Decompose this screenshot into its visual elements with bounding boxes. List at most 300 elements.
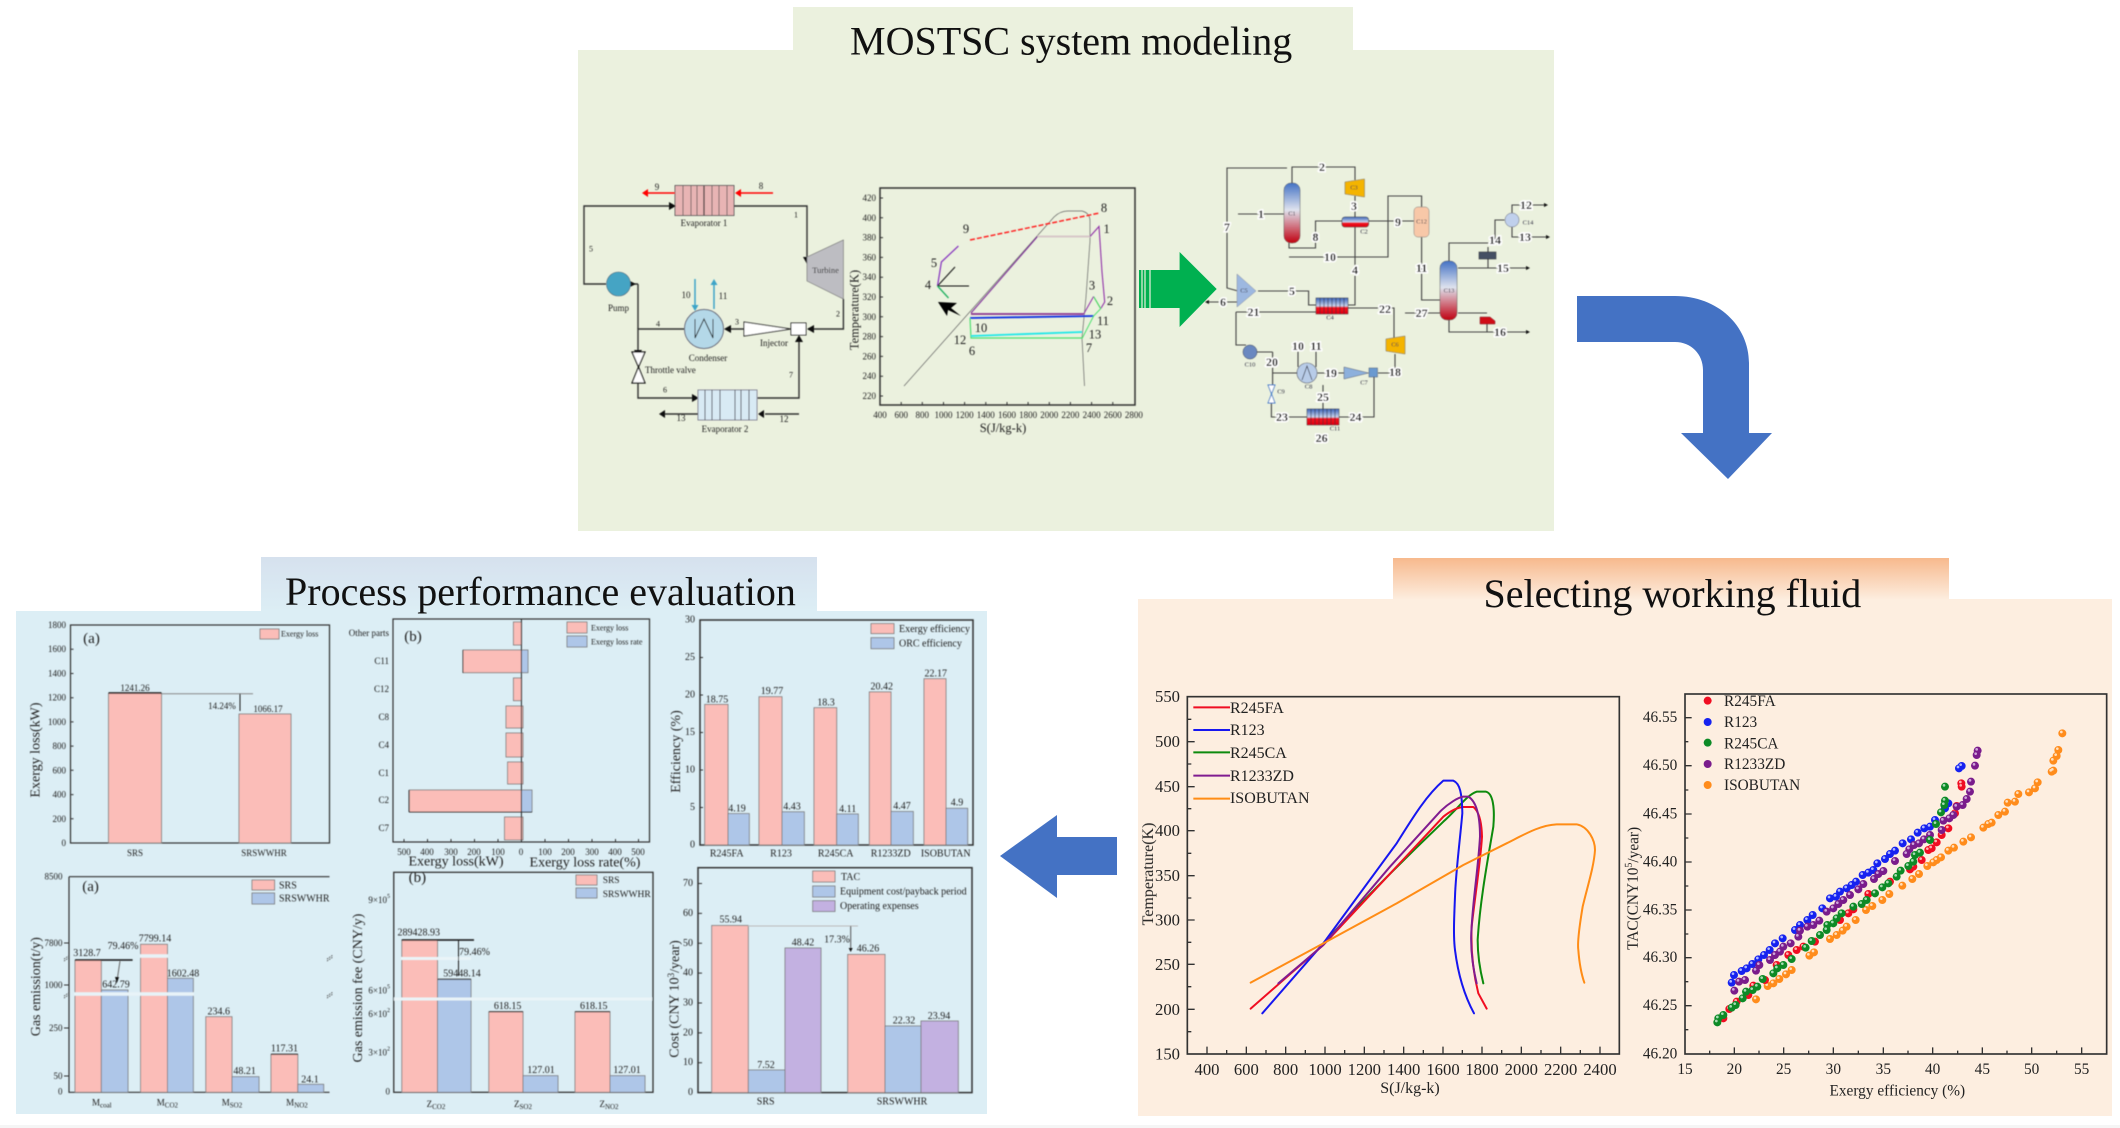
axis labels: Exergy loss(kW) <box>408 854 504 870</box>
value labels and reduction arrow: 289428.93 <box>398 928 440 938</box>
axis labels: 200 <box>52 814 66 824</box>
series: R245FA <box>1722 782 1962 1018</box>
value labels and reduction arrow: 48.42 <box>792 937 814 948</box>
value labels and reduction arrow: 1602.48 <box>167 968 199 980</box>
T-S axis labels: 400 <box>862 213 876 223</box>
state point numbers: 3 <box>1089 278 1095 292</box>
axes: 40 <box>683 968 693 979</box>
axes: 20 <box>685 690 695 700</box>
value labels and reduction arrow: 234.6 <box>208 1006 230 1018</box>
column C13 <box>1440 261 1457 320</box>
evaporator 2: Evaporator 2 <box>702 424 748 434</box>
axes: 30 <box>685 614 695 626</box>
condenser: 11 <box>719 291 727 301</box>
value labels and reduction arrow: 117.31 <box>271 1044 298 1054</box>
T-S axis labels: 1400 <box>977 410 995 420</box>
axis labels: 300 <box>1155 910 1180 929</box>
chart: exergy loss (a) <box>28 620 330 858</box>
axes: NO2 <box>294 1102 308 1110</box>
legend: SRSWWHR <box>603 890 651 900</box>
stream numbers: 11 <box>1310 339 1322 353</box>
T-S axis labels: 240 <box>862 371 876 381</box>
axis labels: 450 <box>1155 777 1180 796</box>
axes: 2 <box>387 1047 390 1053</box>
axes: SO2 <box>230 1102 243 1110</box>
legend: R245CA <box>1724 735 1779 752</box>
axes: 6×10 <box>368 986 387 996</box>
legend: Exergy efficiency <box>899 624 970 635</box>
stream numbers: 19 <box>1325 366 1337 380</box>
evaporator 2: 13 <box>676 413 686 423</box>
axes: coal <box>100 1102 112 1110</box>
legend: R245FA <box>1724 693 1776 710</box>
axis ticks <box>1187 719 1600 1054</box>
axis labels: 200 <box>561 847 575 857</box>
diverging bars <box>409 619 532 842</box>
axis labels <box>28 620 287 858</box>
axis labels: 1600 <box>48 644 66 654</box>
stream numbers: 14 <box>1489 233 1501 247</box>
chart: system T-S diagram <box>848 188 1143 435</box>
axis labels: 2000 <box>1505 1060 1538 1079</box>
bars <box>74 944 324 1092</box>
working fluid loop lines: 4 <box>656 320 660 328</box>
T-S axis labels: 600 <box>894 410 908 420</box>
axis labels: (a) <box>83 631 100 647</box>
axis labels: 46.25 <box>1643 997 1678 1014</box>
evaporator 1: Evaporator 1 <box>681 218 727 228</box>
axis labels: C8 <box>378 712 389 722</box>
column C1: C1 <box>1288 210 1296 218</box>
axes: M <box>222 1098 230 1108</box>
axis labels: C12 <box>374 684 389 694</box>
axes: 70 <box>683 878 693 889</box>
axis labels: 45 <box>1975 1061 1990 1078</box>
state point numbers: 8 <box>1101 201 1107 215</box>
throttle valve: Throttle valve <box>645 365 696 375</box>
arrow: blue left to evaluation <box>1000 815 1117 898</box>
value labels and reduction arrow: 642.79 <box>102 980 130 990</box>
axis labels <box>349 628 645 870</box>
axis labels: 20 <box>1727 1061 1742 1078</box>
axis labels: Exergy efficiency (%) <box>1830 1082 1965 1099</box>
legend: R123 <box>1230 722 1265 739</box>
axis labels: 55 <box>2074 1061 2090 1078</box>
axes: 5 <box>690 802 695 813</box>
value labels and reduction arrow: 59448.14 <box>443 968 481 980</box>
column C1 <box>1284 183 1300 243</box>
reduction annotation: 1241.26 <box>120 683 150 693</box>
legend: R1233ZD <box>1724 756 1785 773</box>
chart: exergy loss by component (b) <box>349 619 650 870</box>
turbine: Turbine <box>812 265 839 275</box>
legend: SRSWWHR <box>279 894 330 904</box>
axis labels: 46.35 <box>1643 901 1678 918</box>
axis labels: 1400 <box>1387 1060 1420 1079</box>
T-S axis labels: Temperature(K) <box>848 270 862 350</box>
axes <box>666 878 928 1108</box>
axes: R245CA <box>818 848 854 860</box>
axis labels: C7 <box>378 823 389 833</box>
stream numbers: 25 <box>1317 390 1329 404</box>
legend <box>567 622 643 647</box>
axis labels: C2 <box>378 795 389 805</box>
compressor C6: C6 <box>1391 342 1400 348</box>
axes: 6×10 <box>368 1009 387 1019</box>
axes: 0 <box>688 1087 693 1098</box>
axes: ISOBUTAN <box>921 848 971 860</box>
axis labels: 600 <box>52 765 66 775</box>
pump C10 <box>1243 345 1257 368</box>
legend: Exergy loss <box>591 624 628 632</box>
value labels: 4.47 <box>893 801 911 812</box>
T-S axis labels: 2400 <box>1083 410 1101 420</box>
working fluid loop lines: 6 <box>663 386 667 394</box>
stream numbers: 8 <box>1312 230 1318 244</box>
arrow: curved blue to working fluid <box>1577 296 1772 479</box>
axis labels: 500 <box>397 847 411 857</box>
stream numbers: 21 <box>1248 305 1260 319</box>
T-S axis labels: 1200 <box>956 410 974 420</box>
stream numbers: 16 <box>1494 325 1506 339</box>
T-S axis labels: 1800 <box>1019 410 1038 420</box>
diagram: ORC cycle schematic <box>584 181 843 434</box>
state point numbers: 4 <box>925 278 932 292</box>
value labels: 20.42 <box>870 682 893 692</box>
evaporator 2: 12 <box>780 414 788 424</box>
chart: efficiency by working fluid <box>669 614 973 860</box>
T-S axis labels: 380 <box>862 233 876 243</box>
axes <box>29 872 333 1110</box>
working fluid loop lines: 2 <box>836 310 840 318</box>
stream numbers: 22 <box>1379 302 1391 316</box>
value labels and reduction arrow: 79.46% <box>108 941 138 952</box>
evaporator 2 <box>659 390 799 434</box>
value labels and reduction arrow: 22.32 <box>893 1016 915 1026</box>
stream numbers: 12 <box>1520 198 1532 212</box>
value labels: 18.75 <box>706 694 728 706</box>
stream numbers <box>1220 160 1532 445</box>
legend: R245FA <box>1230 700 1284 717</box>
axis labels: 400 <box>52 790 66 800</box>
stream numbers: 18 <box>1389 365 1401 379</box>
axis labels: 600 <box>1234 1060 1259 1079</box>
T-S axis labels <box>848 193 1143 435</box>
value labels: 4.11 <box>839 804 856 815</box>
state point numbers: 2 <box>1107 294 1113 308</box>
bars <box>712 926 958 1093</box>
state point numbers: 9 <box>963 222 969 236</box>
axis labels: 100 <box>491 847 505 857</box>
axis labels: 1800 <box>48 620 66 630</box>
axes: 250 <box>49 1023 63 1033</box>
stream numbers: 4 <box>1352 263 1358 277</box>
axis labels: 300 <box>585 847 599 857</box>
chart: T-S curves of working fluids <box>1140 687 1619 1097</box>
T-S axis labels: 420 <box>862 193 876 203</box>
axis labels: 50 <box>2024 1061 2040 1078</box>
axis labels: 35 <box>1876 1061 1891 1078</box>
axis labels: 800 <box>52 741 66 751</box>
series: R1233ZD <box>1733 749 1978 991</box>
column C13: C13 <box>1444 288 1454 294</box>
legend: ORC efficiency <box>899 638 962 649</box>
bars <box>394 940 652 1092</box>
stream numbers: 3 <box>1351 199 1357 213</box>
legend: R123 <box>1724 714 1758 731</box>
condenser: Condenser <box>689 353 727 363</box>
axes: R1233ZD <box>871 848 911 860</box>
axes: 30 <box>683 998 693 1008</box>
axes: 60 <box>683 908 693 919</box>
stream numbers: 11 <box>1416 261 1427 275</box>
axis labels: 5 <box>1623 863 1634 868</box>
axis labels <box>1623 709 2090 1099</box>
bars <box>108 693 291 843</box>
axes: (b) <box>409 870 426 886</box>
axis labels: 800 <box>1273 1060 1298 1079</box>
axes: SRS <box>757 1096 775 1108</box>
condenser drum <box>1479 252 1496 259</box>
curves <box>1251 781 1595 1013</box>
reduction annotation <box>120 683 283 714</box>
legend: ISOBUTAN <box>1724 777 1800 794</box>
axes: SRSWWHR <box>877 1096 928 1108</box>
axis labels: 1800 <box>1465 1060 1499 1079</box>
axes: Efficiency (%) <box>669 710 684 793</box>
vessel C12 <box>1414 207 1429 237</box>
legend <box>576 875 651 900</box>
value labels: 4.9 <box>951 798 963 808</box>
T-S axis labels: 1600 <box>998 410 1016 420</box>
state point numbers: 11 <box>1097 314 1109 328</box>
axes: R123 <box>770 848 792 860</box>
axis labels: 400 <box>608 847 622 857</box>
axes: 5 <box>387 985 390 991</box>
reduction annotation: 1066.17 <box>253 704 283 714</box>
cooler C14: C14 <box>1523 220 1534 226</box>
heat exchanger C2: C2 <box>1360 228 1368 236</box>
state point numbers: 13 <box>1089 328 1101 342</box>
condenser <box>682 279 727 363</box>
stream numbers: 23 <box>1276 410 1288 424</box>
T-S axis labels: 360 <box>862 252 876 262</box>
state point numbers: 5 <box>931 256 937 270</box>
series: R123 <box>1731 765 1962 983</box>
legend <box>871 624 970 649</box>
axis labels: SRS <box>127 848 143 858</box>
value labels and reduction arrow <box>73 934 319 1086</box>
stream numbers: 6 <box>1220 295 1226 309</box>
throttle valve <box>632 352 696 383</box>
legend <box>1708 693 1800 794</box>
axes: Z <box>514 1099 520 1109</box>
legend: Exergy loss rate <box>591 638 643 646</box>
axis labels: 2200 <box>1544 1060 1577 1079</box>
cooler C14 <box>1505 213 1534 227</box>
state point numbers: 12 <box>954 333 966 347</box>
injector: Injector <box>760 338 788 348</box>
legend: Operating expenses <box>840 901 919 912</box>
condenser C8 <box>1297 363 1317 390</box>
axes: /year) <box>668 940 682 973</box>
series: ISOBUTAN <box>1755 732 2062 999</box>
axis labels: 1200 <box>48 693 66 703</box>
axes <box>351 870 619 1111</box>
T-S axis labels: 220 <box>862 391 876 401</box>
condenser C8: C8 <box>1305 384 1312 390</box>
T-S axis labels: 280 <box>862 332 876 342</box>
axis labels: 1400 <box>48 668 66 678</box>
turbine <box>807 240 843 299</box>
T-S axis labels: 2000 <box>1040 410 1059 420</box>
value labels and reduction arrow: 17.3% <box>824 934 850 946</box>
panel: Process performance evaluation <box>16 557 987 1114</box>
value labels and reduction arrow: 46.26 <box>857 944 879 954</box>
stream numbers: 2 <box>1319 160 1325 174</box>
T-S axis labels: 400 <box>873 410 887 420</box>
T-S axis labels: S(J/kg-k) <box>980 421 1026 435</box>
value labels and reduction arrow: 55.94 <box>719 914 742 926</box>
turbine C5: C5 <box>1240 288 1248 294</box>
value labels: 22.17 <box>924 668 947 680</box>
legend: R1233ZD <box>1230 768 1294 785</box>
saturation dome <box>904 211 1090 386</box>
T-S axis labels: 800 <box>916 410 930 420</box>
axis labels: 400 <box>1195 1060 1219 1079</box>
heat exchanger C11 <box>1307 409 1340 432</box>
axis labels: 46.45 <box>1643 805 1678 822</box>
value labels and reduction arrow: 7.52 <box>757 1060 775 1071</box>
pump C10: C10 <box>1245 362 1255 368</box>
T-S axis labels: 1000 <box>934 410 953 420</box>
axis labels: 2400 <box>1583 1060 1617 1079</box>
pump <box>606 272 630 313</box>
stream numbers: 27 <box>1416 306 1428 320</box>
axes: Gas emission(t/y) <box>29 937 44 1036</box>
legend: Equipment cost/payback period <box>840 886 967 898</box>
value labels: 4.19 <box>728 803 746 814</box>
legend <box>1193 700 1310 807</box>
T-S axis labels: 300 <box>862 312 876 322</box>
compressor C3: C3 <box>1350 184 1358 192</box>
hot source streams: 9 <box>655 182 660 192</box>
state point numbers: 1 <box>1103 222 1110 236</box>
state point numbers: 6 <box>969 344 975 358</box>
stream numbers: 26 <box>1316 431 1328 445</box>
heat exchanger C2 <box>1342 217 1369 236</box>
legend: TAC <box>841 872 861 883</box>
condenser: 10 <box>682 290 691 300</box>
injector C7: C7 <box>1360 380 1369 386</box>
pump: Pump <box>608 303 629 313</box>
axis labels: 0 <box>62 838 66 848</box>
legend: R245CA <box>1230 745 1287 762</box>
stream numbers: 10 <box>1324 250 1336 264</box>
axes: 25 <box>685 652 695 663</box>
legend <box>813 871 967 912</box>
arrow: green system to flowsheet <box>1139 252 1217 327</box>
axis labels: 1600 <box>1426 1060 1460 1079</box>
compressor C3 <box>1345 179 1364 197</box>
axes: NO2 <box>605 1103 619 1111</box>
axis labels: (b) <box>404 629 422 645</box>
axis labels: 25 <box>1776 1061 1792 1078</box>
value labels <box>706 668 963 815</box>
stream numbers: 1 <box>1258 207 1264 221</box>
axis labels: 1000 <box>1308 1060 1342 1079</box>
axes: 15 <box>685 727 695 738</box>
axes: 5 <box>387 894 390 900</box>
value labels and reduction arrow: 618.15 <box>580 1001 608 1012</box>
axes: Z <box>427 1099 432 1109</box>
flowsheet pipes <box>1209 167 1546 417</box>
stream numbers: 10 <box>1292 339 1304 353</box>
hot source streams <box>642 181 773 197</box>
stream numbers: 13 <box>1519 230 1531 244</box>
series: R245CA <box>1716 785 1945 1022</box>
axes: CO2 <box>165 1102 179 1110</box>
legend: SRS <box>279 880 297 892</box>
axis labels: 200 <box>1155 1000 1180 1019</box>
stream numbers: 5 <box>1289 284 1295 298</box>
value labels and reduction arrow <box>719 914 950 1071</box>
value labels and reduction arrow: 127.01 <box>613 1065 641 1076</box>
axis labels: 550 <box>1155 687 1180 706</box>
axes: M <box>157 1098 165 1108</box>
T-S axis labels: 260 <box>862 351 876 361</box>
value labels and reduction arrow: 618.15 <box>494 1001 521 1012</box>
axes: 50 <box>683 938 693 949</box>
value labels and reduction arrow: 48.21 <box>233 1066 256 1077</box>
axes: 9×10 <box>368 895 387 905</box>
axis labels: C1 <box>378 768 389 778</box>
axis labels <box>1140 687 1617 1097</box>
heat exchanger C11: C11 <box>1330 426 1340 432</box>
axes: 0 <box>58 1087 63 1097</box>
axis labels: SRSWWHR <box>241 848 287 858</box>
compressor C6 <box>1386 336 1405 354</box>
axes: M <box>92 1098 100 1108</box>
chart: gas emission (a) <box>29 872 333 1110</box>
state point numbers: 10 <box>975 321 987 335</box>
title: MOSTSC system modeling: MOSTSC system modeling <box>850 18 1292 64</box>
axes: 8500 <box>44 872 63 882</box>
axis labels: 400 <box>420 847 434 857</box>
axis labels: C4 <box>378 740 389 750</box>
axes: 10 <box>685 764 695 776</box>
title: Process performance evaluation: Process performance evaluation <box>285 569 796 614</box>
axis labels: 46.20 <box>1643 1045 1678 1062</box>
axis labels: 500 <box>1155 732 1180 751</box>
legend: ISOBUTAN <box>1230 790 1310 807</box>
axis labels: 250 <box>1155 955 1180 974</box>
value labels: 4.43 <box>783 802 801 812</box>
value labels and reduction arrow: 24.1 <box>301 1074 319 1086</box>
axis labels: /year) <box>1625 827 1642 863</box>
value labels: 19.77 <box>761 686 783 697</box>
axis labels: 46.55 <box>1643 709 1678 726</box>
stream numbers: 20 <box>1266 355 1278 369</box>
axes: CO2 <box>432 1103 446 1111</box>
legend <box>260 629 318 639</box>
heat exchanger C4 <box>1316 298 1348 322</box>
injector <box>744 322 806 348</box>
axes: 10 <box>683 1057 693 1068</box>
axes: 2 <box>387 1008 390 1014</box>
vessel C12: C12 <box>1416 218 1427 226</box>
value labels and reduction arrow <box>398 928 641 1076</box>
